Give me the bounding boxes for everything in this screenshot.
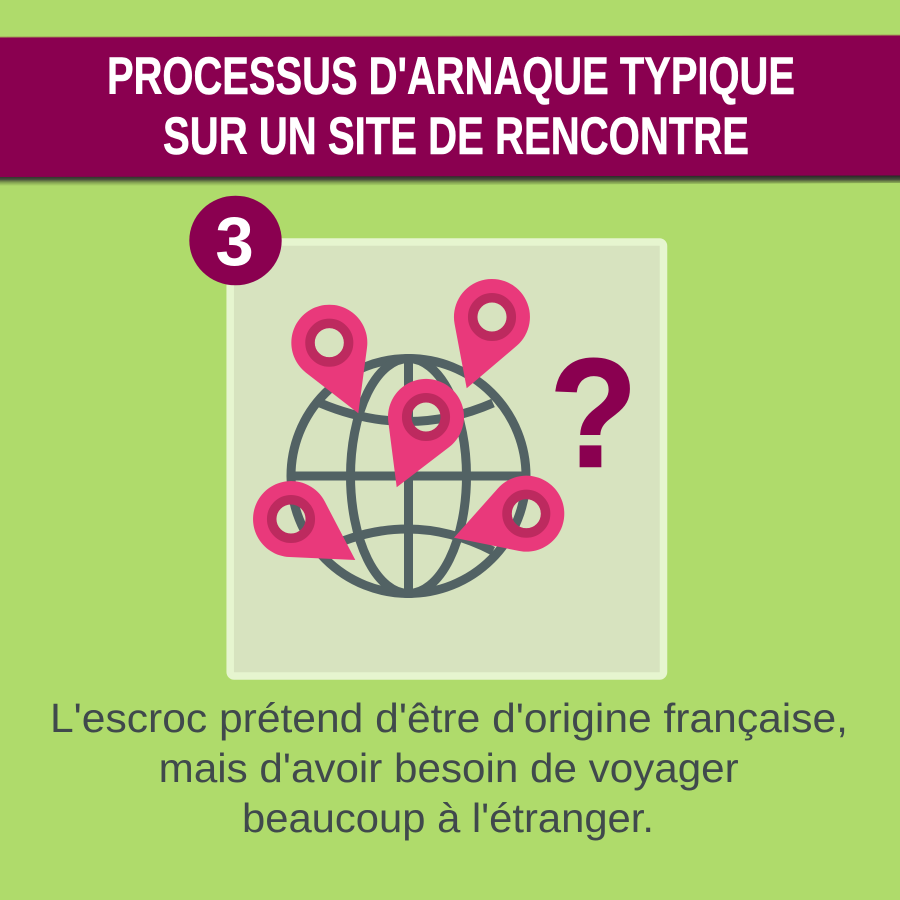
icon: location pin centre [388,379,464,487]
question mark: ? [549,327,638,500]
step number badge: 3 [215,203,254,280]
icon: location pin top right [454,279,530,388]
description text: L'escroc prétend d'être d'origine française, [50,695,848,741]
panel: illustration card [230,242,663,676]
icon: globe [291,358,526,594]
icon: location pin lower right [454,476,564,552]
icon: location pin top left [291,305,367,413]
icon: location pin lower left [253,481,355,560]
description text: beaucoup à l'étranger. [242,795,654,841]
description text: mais d'avoir besoin de voyager [159,745,739,791]
title banner [0,34,900,187]
step number badge [189,196,282,285]
